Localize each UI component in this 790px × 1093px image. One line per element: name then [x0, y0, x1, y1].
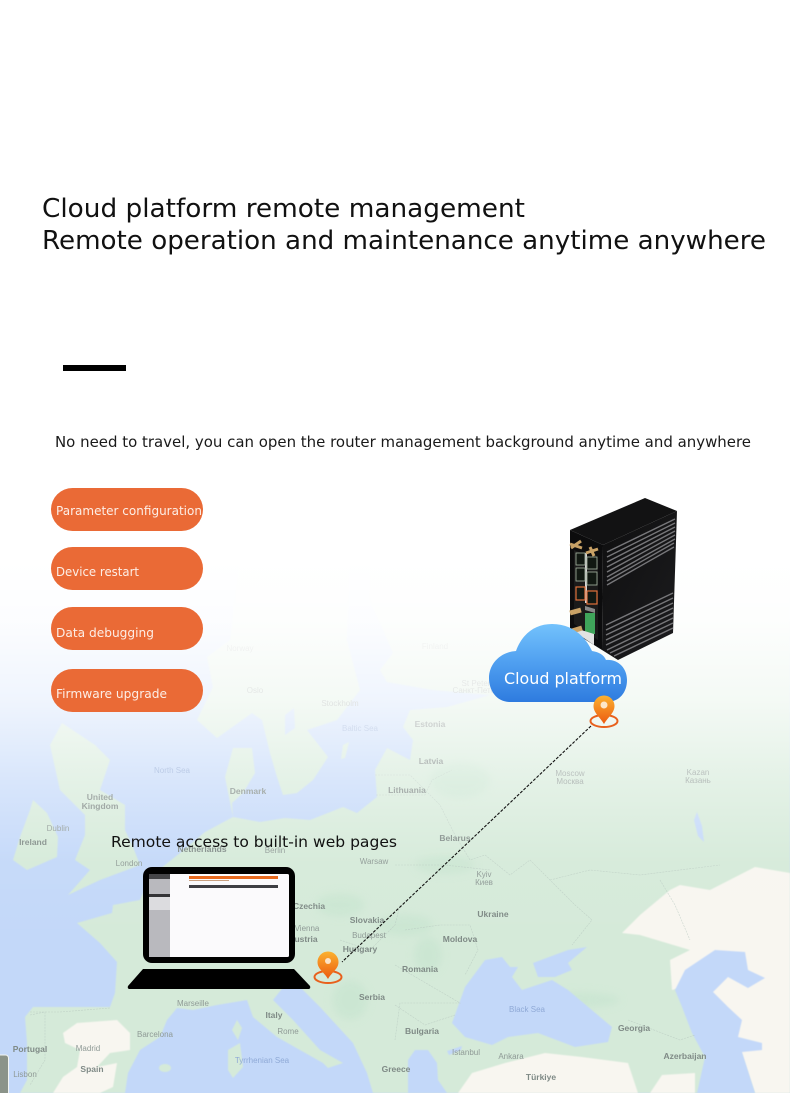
- router device: [570, 498, 677, 660]
- background map of Europe: Hungary: [343, 944, 378, 954]
- background map of Europe: Georgia: [618, 1023, 650, 1033]
- background map of Europe: Türkiye: [526, 1072, 556, 1082]
- background map of Europe: Rome: [277, 1027, 299, 1036]
- background map of Europe: Kingdom: [82, 801, 119, 811]
- forest shading: [377, 914, 433, 936]
- feature pill: device restart: [51, 547, 203, 590]
- background map of Europe: Warsaw: [360, 857, 389, 866]
- dashed connection line: [342, 726, 591, 962]
- background map of Europe: Azerbaijan: [664, 1051, 706, 1061]
- background map of Europe: Marseille: [177, 999, 210, 1008]
- background map of Europe: Czechia: [293, 901, 325, 911]
- background map of Europe: Москва: [556, 777, 584, 786]
- background map of Europe: Киев: [475, 878, 493, 887]
- feature pill: device restart: Device restart: [56, 565, 139, 579]
- background map of Europe: [0, 520, 790, 1093]
- background map of Europe: Moldova: [443, 934, 478, 944]
- feature pill: data debugging: [51, 607, 203, 650]
- background map of Europe: United: [87, 792, 113, 802]
- background map of Europe: St Peters: [462, 679, 494, 688]
- background map of Europe: London: [116, 859, 142, 868]
- background map of Europe: Bulgaria: [405, 1026, 439, 1036]
- background map of Europe: Moscow: [555, 769, 585, 778]
- land: continental Europe and Asia: [20, 560, 790, 1093]
- background map of Europe: Stockholm: [321, 699, 359, 708]
- seas and lakes: [452, 957, 612, 1047]
- background map of Europe: North Sea: [154, 766, 191, 775]
- background map of Europe: Lisbon: [13, 1070, 37, 1079]
- background map of Europe: Slovakia: [350, 915, 385, 925]
- feature pill: firmware upgrade: Firmware upgrade: [56, 687, 167, 701]
- laptop: [128, 867, 310, 989]
- cloud: cloud platform: Cloud platform: [504, 669, 622, 688]
- land: Scandinavia: [197, 560, 360, 795]
- background map of Europe: Greece: [382, 1064, 411, 1074]
- background map of Europe: Serbia: [359, 992, 385, 1002]
- background map of Europe: Dublin: [47, 824, 69, 833]
- background map of Europe: Estonia: [415, 719, 446, 729]
- background map of Europe: Istanbul: [452, 1048, 480, 1057]
- background map of Europe: Kyiv: [476, 870, 492, 879]
- background map of Europe: Санкт-Петер: [452, 686, 500, 695]
- subtitle: No need to travel, you can open the router management background anytime and anywhere: [55, 433, 751, 451]
- background map of Europe: Spain: [80, 1064, 104, 1074]
- background map of Europe: Oslo: [247, 686, 264, 695]
- title: Remote operation and maintenance anytime anywhere: [42, 226, 766, 256]
- background map of Europe: Vienna: [295, 924, 320, 933]
- background map of Europe: Tyrrhenian Sea: [235, 1056, 290, 1065]
- feature pill: parameter configuration: Parameter configuration: [56, 504, 202, 518]
- arid regions: [622, 867, 790, 1093]
- feature pill: data debugging: Data debugging: [56, 626, 154, 640]
- background map of Europe: Finland: [422, 642, 448, 651]
- background map of Europe: Ankara: [498, 1052, 524, 1061]
- background map of Europe: Madrid: [76, 1044, 100, 1053]
- accent bar: [63, 365, 126, 371]
- cloud: cloud platform: [489, 624, 627, 702]
- background map of Europe: Romania: [402, 964, 438, 974]
- background map of Europe: Austria: [288, 934, 318, 944]
- background map of Europe: Portugal: [13, 1044, 47, 1054]
- land: Great Britain: [50, 723, 140, 895]
- map thumbnail corner: [0, 1055, 8, 1093]
- country borders: [375, 775, 592, 945]
- title: [42, 194, 766, 256]
- feature pill: firmware upgrade: [51, 669, 203, 712]
- label: remote access: Remote access to built-in web pages: [111, 833, 397, 851]
- background map of Europe: Black Sea: [509, 1005, 546, 1014]
- location pin: cloud: [590, 696, 618, 727]
- background map of Europe: Ukraine: [477, 909, 509, 919]
- land: islands: [232, 1020, 242, 1040]
- background map of Europe: Barcelona: [137, 1030, 174, 1039]
- title: Cloud platform remote management: [42, 194, 525, 224]
- background map of Europe: Berlin: [265, 846, 285, 855]
- background map of Europe: Netherlands: [177, 844, 227, 854]
- background map of Europe: Kazan: [687, 768, 709, 777]
- land: Ireland: [13, 800, 58, 870]
- background map of Europe: Lithuania: [388, 785, 426, 795]
- background map of Europe: Belarus: [439, 833, 471, 843]
- background map of Europe: Latvia: [419, 756, 444, 766]
- white fade over the map: [0, 520, 790, 940]
- background map of Europe: Baltic Sea: [342, 724, 379, 733]
- background map of Europe: Denmark: [230, 786, 266, 796]
- location pin: laptop: [314, 952, 342, 983]
- map place names: Norway: [226, 644, 254, 653]
- background map of Europe: Ireland: [19, 837, 47, 847]
- background map of Europe: Budapest: [352, 931, 387, 940]
- feature pill: parameter configuration: [51, 488, 203, 531]
- background map of Europe: Казань: [685, 776, 711, 785]
- background map of Europe: Italy: [265, 1010, 283, 1020]
